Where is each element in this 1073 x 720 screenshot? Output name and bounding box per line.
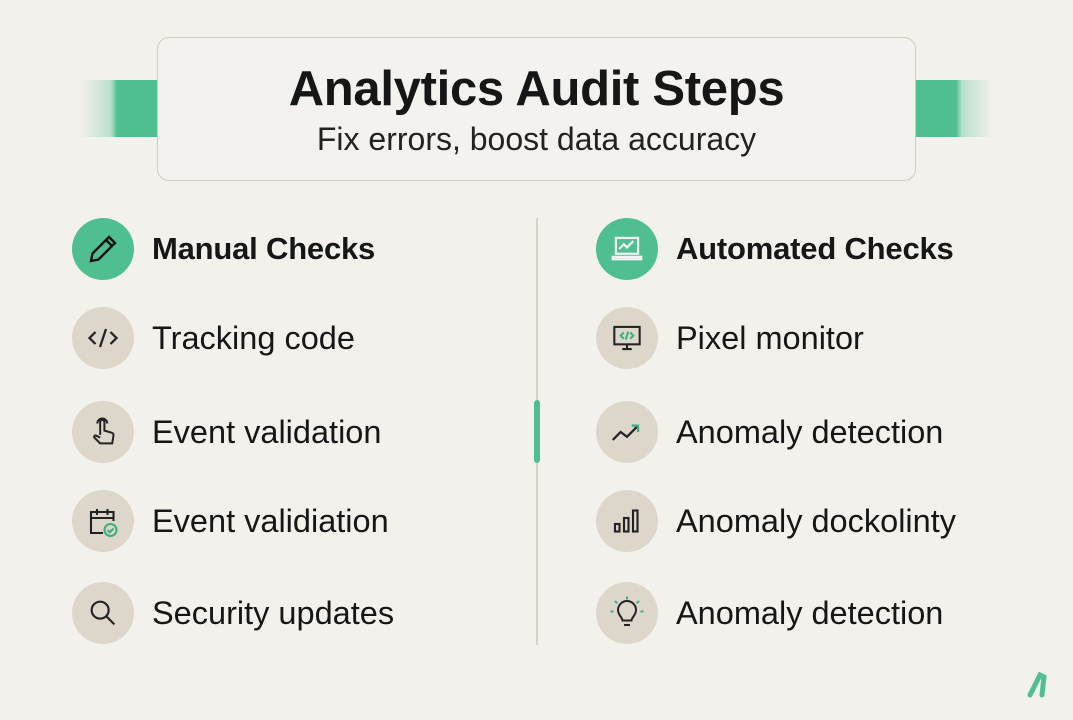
icon: pencil [72,218,134,280]
icon: calendar check [72,490,134,552]
icon: monitor code [596,307,658,369]
item: tracking code: Tracking code [152,320,355,356]
item: anomaly detection 2: Anomaly detection [676,595,943,631]
title box [157,37,916,181]
item: security updates: Security updates [152,595,394,631]
heading: manual checks: Manual Checks [152,231,375,266]
icon: hand [72,401,134,463]
item: anomaly detection: Anomaly detection [676,414,943,450]
item: pixel monitor: Pixel monitor [676,320,864,356]
title: Analytics Audit Steps [289,62,784,116]
item: event validation: Event validation [152,414,381,450]
logo mark [1028,672,1047,698]
panel: automated checks [596,218,956,644]
icon: trend [596,401,658,463]
icon: bar chart [596,490,658,552]
icon: lightbulb [596,582,658,644]
subtitle: Fix errors, boost data accuracy [317,121,756,157]
heading: automated checks: Automated Checks [676,231,954,266]
divider accent [534,400,540,463]
divider [536,218,538,645]
icon: laptop chart [596,218,658,280]
panel: manual checks [72,218,394,644]
left green accent bar [80,80,157,137]
icon: search [72,582,134,644]
item: anomaly dockolinty: Anomaly dockolinty [676,503,956,539]
icon: code [72,307,134,369]
right green accent bar [916,80,993,137]
item: event validiation: Event validiation [152,503,389,539]
